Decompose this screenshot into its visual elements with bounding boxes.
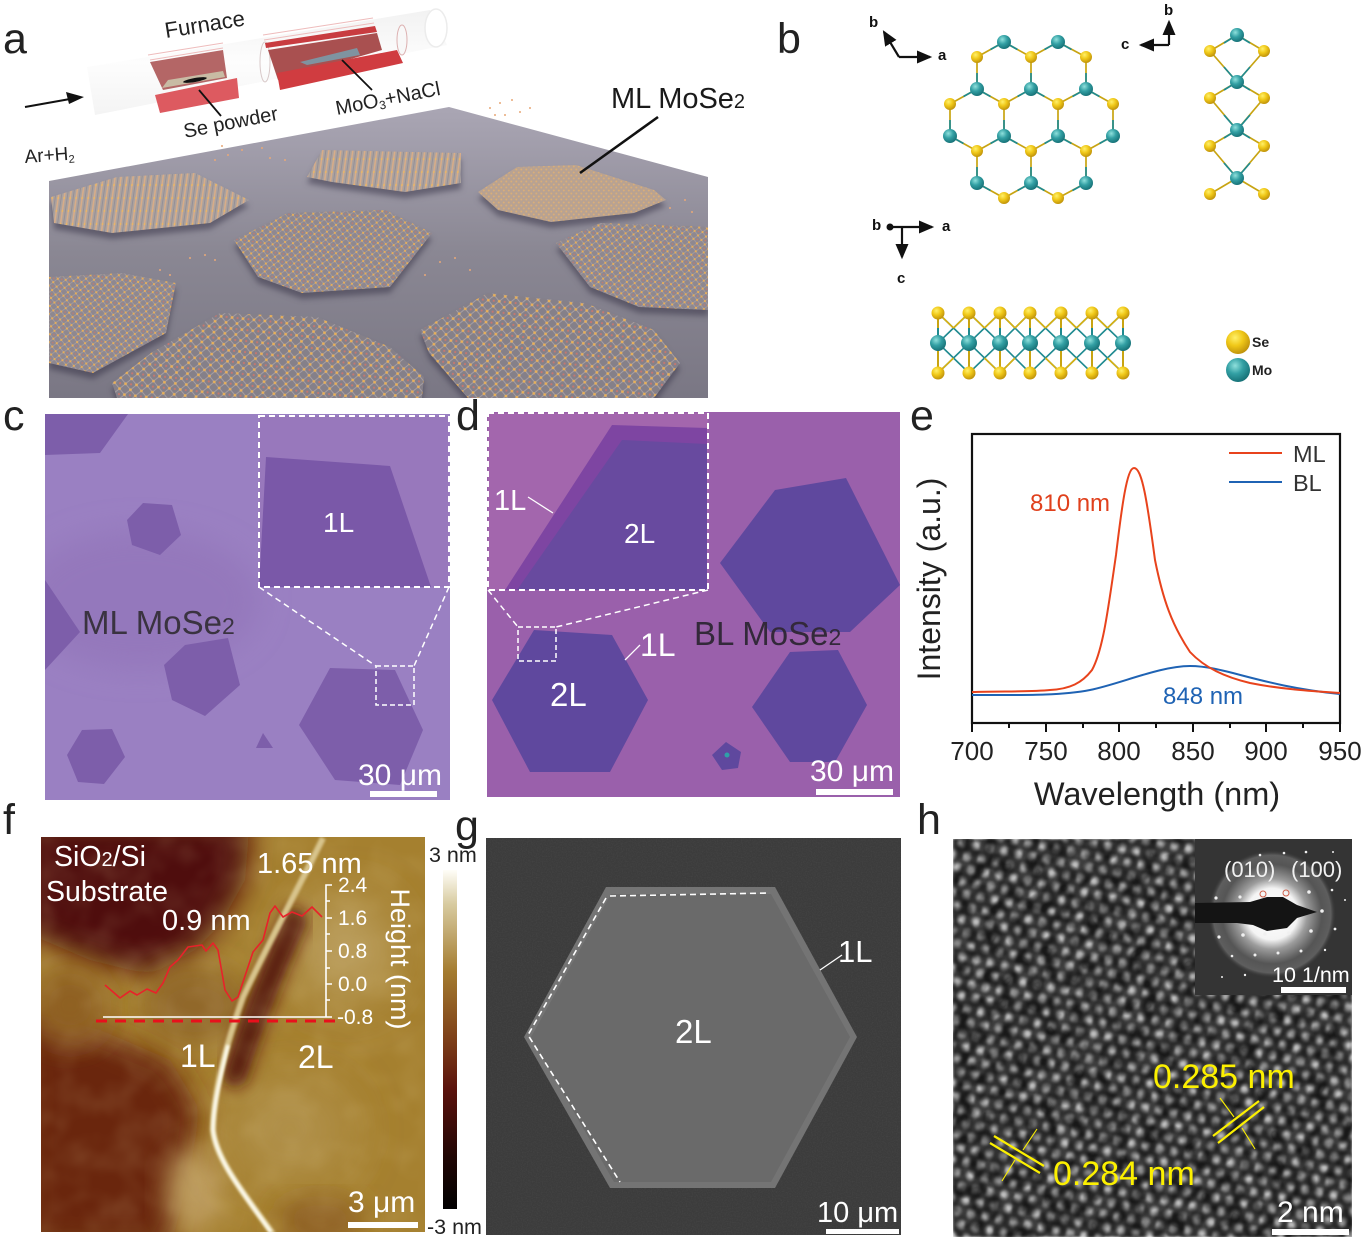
ML curve (972, 468, 1340, 693)
panel label: d: d (456, 392, 480, 440)
label: MoO3+NaCl: 3 (378, 98, 388, 113)
axes: front view: b (872, 217, 881, 234)
annotation: 848 nm: 848 nm (1163, 683, 1243, 710)
label: ML MoSe2 (580, 83, 745, 173)
axes: front view: a (942, 218, 951, 235)
scale bar: 2 nm: 2 nm (1277, 1196, 1344, 1229)
line-scan marker (96, 1020, 335, 1022)
label: 1L (624, 634, 674, 660)
MoSe2 flakes (49, 150, 712, 398)
red boat: Se powder (150, 50, 239, 113)
height profile axis: 2.4 (338, 874, 368, 897)
x tick labels: 750 (1024, 736, 1068, 766)
x tick labels: 950 (1318, 736, 1362, 766)
AFM height map (41, 837, 425, 1232)
panel b: crystal structure (869, 2, 1272, 382)
x tick labels (950, 736, 1362, 766)
label: MoO3+NaCl: +NaCl (383, 78, 442, 110)
scattered precursor particles (159, 99, 693, 276)
axes: top view: b (869, 14, 878, 31)
inset zoom (259, 416, 449, 705)
label: 1L: 1L (838, 934, 872, 969)
height profile axis: 1.6 (338, 907, 367, 930)
panel a: CVD schematic (24, 6, 745, 398)
label: Ar+H2: Ar+H (24, 144, 69, 168)
label: 2L: 2L (298, 1039, 334, 1075)
height profile curve (105, 906, 322, 1001)
scale bar: 30 um: 30 μm (810, 755, 894, 788)
height profile axis: Height (nm) (385, 888, 415, 1030)
label: Ar+H2: 2 (68, 154, 75, 166)
bilayer flakes (492, 478, 900, 772)
inset zoom (488, 413, 708, 661)
legend: atoms: Mo (1252, 362, 1272, 378)
colorbar (427, 843, 482, 1239)
x tick labels: 700 (950, 736, 994, 766)
axes: side view (1121, 2, 1173, 53)
annotation: 810 nm: 810 nm (1030, 490, 1110, 517)
label: Furnace: Furnace (163, 6, 247, 43)
panel label: e: e (910, 392, 934, 440)
annotation: 0.284 nm: 0.284 nm (1053, 1155, 1195, 1193)
BL curve (972, 666, 1340, 695)
legend (1229, 441, 1326, 496)
scale bar: 30 um (811, 760, 893, 795)
plot frame and ticks (972, 434, 1340, 732)
annotation: 0.284 nm (990, 1129, 1195, 1193)
SAED inset (1195, 839, 1352, 995)
height profile axis (103, 874, 415, 1030)
panel label: g: g (455, 802, 479, 850)
label: MoO3+NaCl: MoO (334, 90, 381, 120)
label: ML MoSe2: ML MoSe2 (611, 83, 745, 115)
arrow: gas flow (25, 92, 84, 107)
label: BL MoSe2: BL MoSe2 (694, 615, 841, 652)
red boat: MoO3 NaCl (265, 26, 403, 90)
label: 1L: 1L (323, 507, 354, 538)
axes: top view: a (938, 47, 947, 64)
scale bar: 30 um: 30 μm (358, 759, 442, 792)
axes: front view: c (897, 270, 905, 287)
substrate plate (49, 107, 708, 398)
furnace tube (87, 9, 447, 115)
label: 0.9 nm: 0.9 nm (162, 905, 251, 937)
label: 1L: 1L (640, 627, 676, 663)
panel label: a: a (3, 15, 27, 63)
front-view layer (930, 306, 1131, 380)
x tick labels: 800 (1097, 736, 1141, 766)
axes: front view (872, 217, 951, 287)
scale bar: 3 um: 3 μm (348, 1186, 415, 1219)
legend: atoms (1226, 330, 1272, 382)
panel label: b: b (777, 15, 801, 63)
colorbar: 3 nm (429, 843, 477, 867)
label: 1.65 nm: 1.65 nm (257, 848, 362, 880)
label: SiO2/Si Substrate: SiO2/Si (54, 841, 146, 873)
top-view honeycomb lattice (943, 35, 1120, 204)
hexagonal flake (524, 887, 857, 1188)
label: MoO3+NaCl (334, 60, 442, 121)
label: inset 2L: 2L (624, 518, 655, 549)
height profile axis: 0.8 (338, 940, 367, 963)
panel e: PL spectrum chart (911, 434, 1362, 812)
label: SiO2/Si Substrate: Substrate (46, 876, 168, 908)
legend: BL (1293, 470, 1322, 496)
label: ML MoSe2: ML MoSe2 (82, 604, 235, 641)
annotation: 0.285 nm: 0.285 nm (1153, 1058, 1295, 1096)
label: 2L: 2L (675, 1013, 712, 1050)
SAED inset: (100) (1291, 857, 1342, 882)
y axis title: Intensity (a.u.) (911, 478, 947, 680)
height profile axis: -0.8 (337, 1006, 373, 1029)
label: inset 1L: 1L (494, 485, 526, 517)
panel d: optical image BL (487, 412, 900, 797)
colorbar: -3 nm (427, 1215, 482, 1239)
label: 1L: 1L (180, 1038, 216, 1074)
axes: side view: b (1164, 2, 1173, 19)
annotation: 0.285 nm (1153, 1058, 1295, 1149)
small flake centre dot (724, 752, 730, 758)
panel label: f: f (3, 796, 16, 844)
label: inset 1L (496, 490, 554, 514)
legend: atoms: Se (1252, 334, 1269, 350)
flakes (45, 414, 423, 785)
x axis title: Wavelength (nm) (1034, 776, 1280, 812)
panel g: SEM image (486, 838, 901, 1235)
panel label: h: h (917, 796, 941, 844)
scale bar: 10 um: 10 μm (817, 1197, 898, 1229)
panel label: c: c (3, 392, 24, 440)
side-view chain (1204, 28, 1270, 200)
panel h: HRTEM image (953, 839, 1352, 1237)
panel c: optical image ML (20, 414, 450, 800)
SAED inset: (010) (1224, 857, 1275, 882)
x tick labels: 850 (1171, 736, 1215, 766)
label: 2L: 2L (550, 676, 587, 713)
label: 1L (820, 934, 872, 970)
atomic lattice (953, 839, 1352, 1237)
axes: side view: c (1121, 36, 1129, 53)
panel f: AFM image (41, 837, 480, 1234)
height profile axis: 0.0 (338, 973, 367, 996)
axes: top view (869, 14, 947, 64)
x tick labels: 900 (1244, 736, 1288, 766)
SAED inset: 10 1/nm (1272, 963, 1350, 987)
label: Se powder: Se powder (182, 103, 280, 143)
legend: ML (1293, 441, 1326, 467)
